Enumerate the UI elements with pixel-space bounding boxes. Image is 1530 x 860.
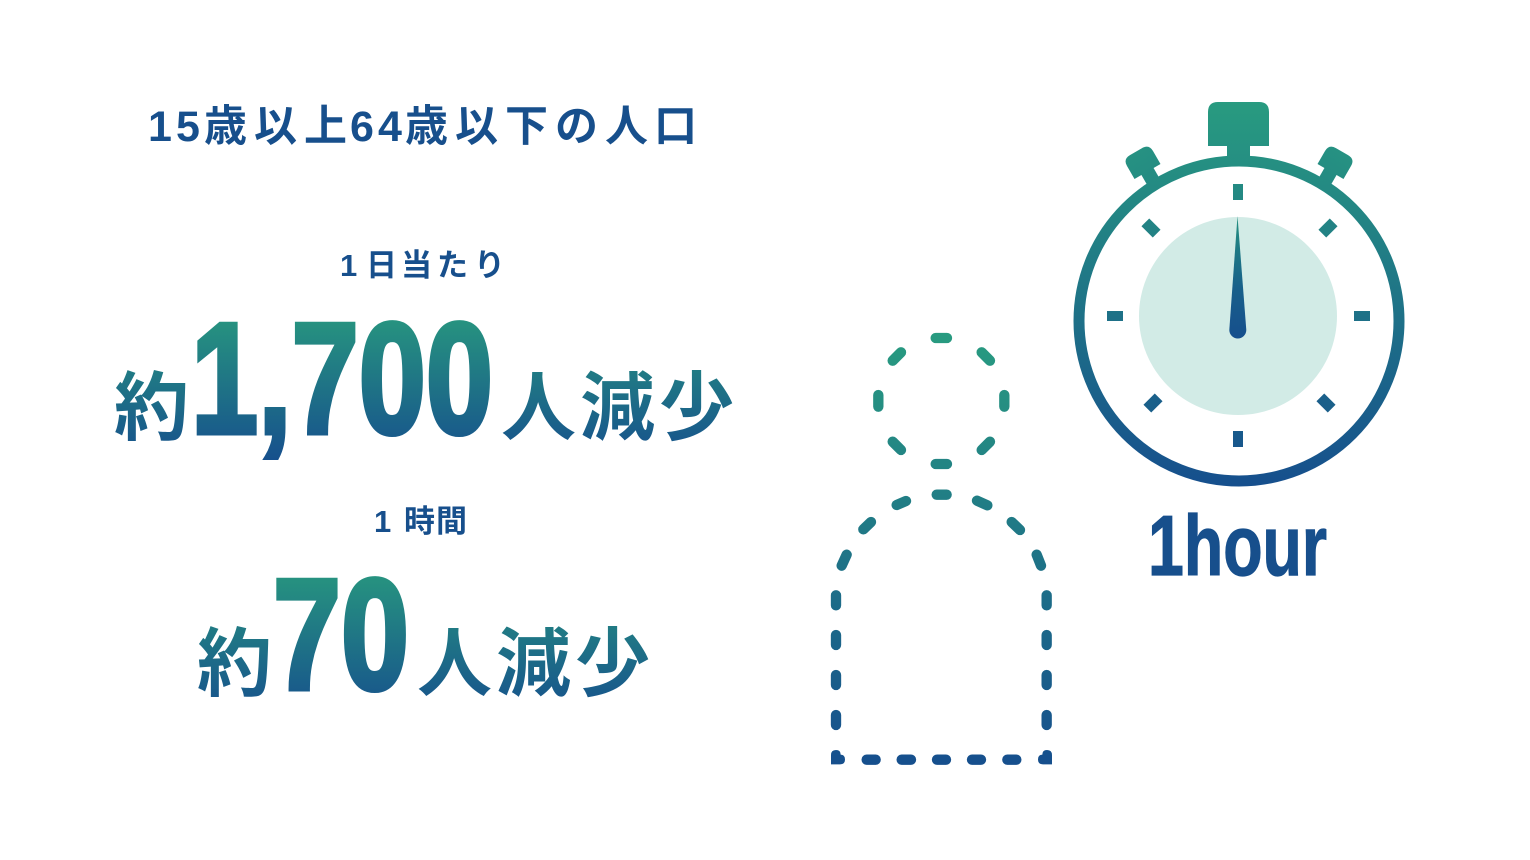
- stat: about 70 fewer people: 人減少: [417, 622, 650, 706]
- person base corners: [831, 750, 1052, 764]
- stat: about 70 fewer people: 約: [197, 622, 272, 706]
- label: per hour: 1時間: [374, 504, 467, 539]
- stopwatch tick marks: [1107, 184, 1370, 447]
- stopwatch ring: [1079, 161, 1399, 481]
- person body dashes: [836, 495, 1047, 760]
- stat: about 1,700 fewer people: 約: [114, 366, 189, 450]
- stat: about 1,700 fewer people: 1,700: [191, 291, 493, 467]
- stat: about 1,700 fewer people: 人減少: [501, 366, 734, 450]
- icon: stopwatch: [1079, 102, 1399, 481]
- stopwatch left button: [1123, 144, 1171, 197]
- stopwatch right button: [1307, 144, 1355, 197]
- heading: 15歳以上64歳以下の人口: [148, 103, 697, 151]
- stopwatch needle: [1229, 216, 1246, 338]
- label: per day: 1日当たり: [340, 248, 505, 283]
- person head dashes: [878, 338, 1004, 464]
- stopwatch crown: [1208, 102, 1269, 162]
- stat: about 70 fewer people: [197, 547, 650, 723]
- stopwatch inner dial: [1139, 217, 1337, 415]
- label: 1hour: 1hour: [1148, 499, 1327, 594]
- stat: about 1,700 fewer people: [114, 291, 734, 467]
- icon: dashed person outline: [831, 338, 1052, 764]
- stat: about 70 fewer people: 70: [273, 547, 409, 723]
